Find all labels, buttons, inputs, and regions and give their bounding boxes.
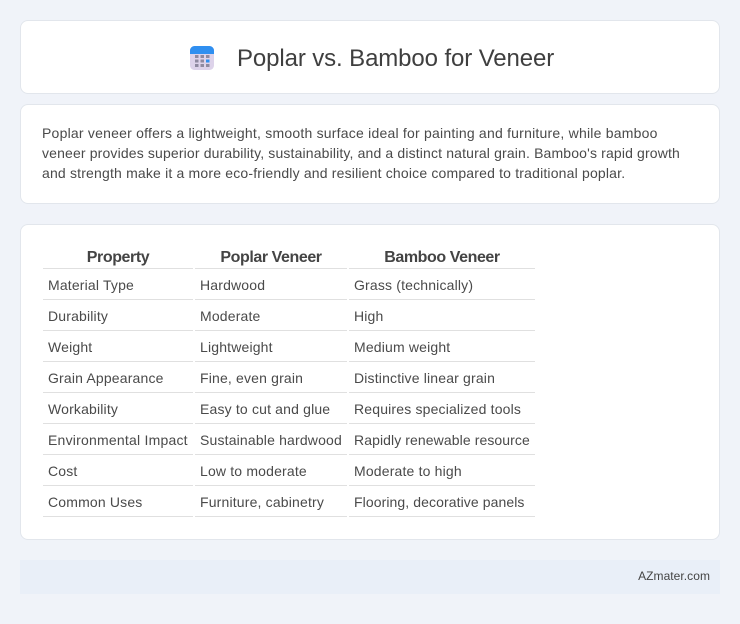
comparison table: Fine, even grain (200, 370, 303, 386)
comparison table: Easy to cut and glue (200, 401, 330, 417)
comparison table: Grain Appearance (48, 370, 164, 386)
comparison table: Distinctive linear grain (354, 370, 495, 386)
footer bar (20, 560, 720, 594)
comparison table: Requires specialized tools (354, 401, 521, 417)
title: Poplar vs. Bamboo for Veneer (237, 45, 554, 72)
comparison table: Medium weight (354, 339, 450, 355)
comparison table: Hardwood (200, 277, 265, 293)
panel: title card (20, 20, 720, 94)
intro text: veneer provides superior durability, sustainability, and a distinct natural grain. Bamboo's rapid growth (42, 145, 680, 161)
comparison table: High (354, 308, 383, 324)
comparison table: Property (87, 249, 149, 266)
comparison table: Durability (48, 308, 108, 324)
comparison table: Sustainable hardwood (200, 432, 342, 448)
intro text: and strength make it a more eco-friendly and resilient choice compared to traditional poplar. (42, 165, 625, 181)
intro text: Poplar veneer offers a lightweight, smooth surface ideal for painting and furniture, while bamboo (42, 125, 658, 141)
footer attribution: AZmater.com (638, 569, 710, 583)
comparison table: Bamboo Veneer (384, 249, 500, 266)
panel: intro card (20, 104, 720, 204)
comparison table: Flooring, decorative panels (354, 494, 525, 510)
comparison table: Workability (48, 401, 118, 417)
comparison table (43, 249, 535, 517)
comparison table: Low to moderate (200, 463, 307, 479)
comparison table: Lightweight (200, 339, 273, 355)
intro text (42, 125, 680, 181)
icon: calendar (190, 46, 214, 70)
comparison table: Environmental Impact (48, 432, 188, 448)
comparison table: Furniture, cabinetry (200, 494, 324, 510)
comparison table: Weight (48, 339, 92, 355)
comparison table: Cost (48, 463, 77, 479)
comparison table: Moderate to high (354, 463, 462, 479)
comparison table: Moderate (200, 308, 261, 324)
comparison table: Common Uses (48, 494, 142, 510)
comparison table: Grass (technically) (354, 277, 473, 293)
panel: table card (20, 224, 720, 540)
comparison table: Poplar Veneer (220, 249, 322, 266)
comparison table: Material Type (48, 277, 134, 293)
comparison table: Rapidly renewable resource (354, 432, 530, 448)
